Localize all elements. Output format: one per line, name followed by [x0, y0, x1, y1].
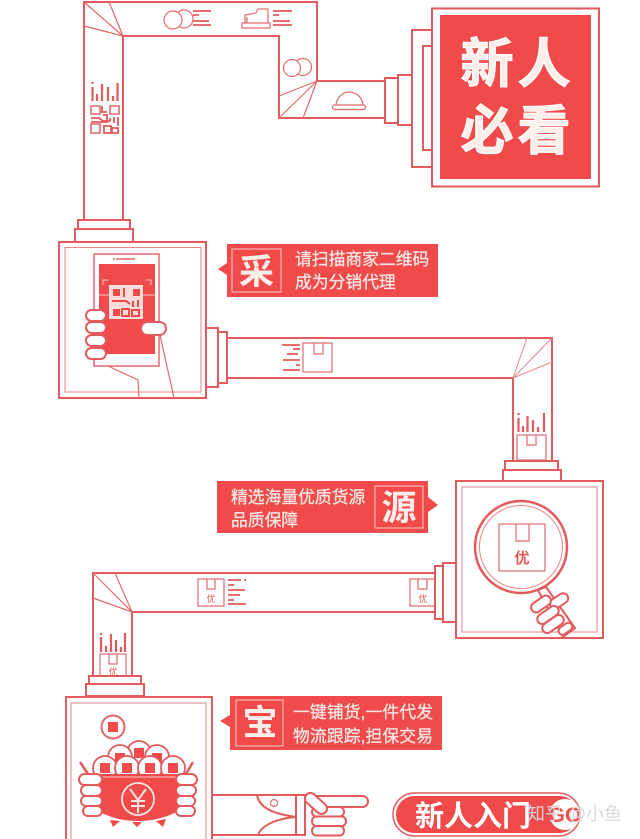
- button: 新人入门 GO: GO: [549, 804, 581, 827]
- button: 新人入门 GO: 新人入门: [415, 800, 531, 833]
- hand holding magnifier: [529, 591, 574, 636]
- icon: bars and parcel on vertical pipe: [100, 633, 126, 677]
- callout: 源: [217, 481, 438, 533]
- title block: 新人必看: [432, 8, 599, 186]
- icon: QR code on vertical pipe: [91, 106, 119, 133]
- icon: parcel with label lines: [198, 579, 246, 606]
- title text: 必: [460, 102, 514, 161]
- callout: 宝: 物流跟踪,担保交易: [293, 727, 433, 746]
- watermark: 知乎 @小鱼: [527, 804, 622, 824]
- icon: cash register on top pipe: [242, 9, 292, 28]
- hand: fingers and wrist: [86, 310, 174, 398]
- flanges: top of first box: [75, 220, 133, 242]
- panel: scan box: [59, 242, 206, 398]
- callout: 采: [218, 244, 438, 297]
- icon: coins in pot: [93, 741, 185, 780]
- flanges: second pipe out of scan box: [206, 328, 227, 387]
- title text: 看: [518, 102, 570, 161]
- icon: magnifier with parcel: 优: [514, 550, 530, 567]
- QR code on phone screen: [109, 285, 143, 319]
- icon: pot with yen sign: [80, 762, 193, 827]
- flanges: top of magnifier box: [503, 461, 561, 482]
- flanges: third pipe out of magnifier box: [435, 563, 456, 622]
- callout: 宝: 一键铺货,一件代发: [293, 703, 433, 722]
- connector: pipe flanges into title box: [385, 30, 432, 167]
- callout: 源: 源: [381, 489, 417, 528]
- button: 新人入门 GO: [393, 793, 581, 836]
- icon: bars and parcel on vertical pipe: [517, 413, 546, 460]
- callout: 采: 采: [239, 253, 274, 292]
- title text: 人: [518, 35, 570, 94]
- icon: parcel with speed lines: [282, 343, 332, 372]
- callout: 采: 请扫描商家二维码: [295, 250, 429, 269]
- icon: bars on vertical pipe: [92, 82, 118, 101]
- icon: pointing hand: [212, 791, 368, 836]
- pipe: third conduit: [93, 573, 435, 677]
- icon: parcel near flange: [410, 579, 435, 606]
- hands holding pot: [79, 774, 197, 816]
- callout: 源: 品质保障: [231, 511, 298, 530]
- callout: 宝: 宝: [242, 704, 278, 743]
- panel: treasure box: [66, 697, 212, 839]
- phone: [94, 254, 159, 366]
- flanges: top of treasure box: [86, 676, 144, 696]
- title text: 新: [460, 35, 514, 94]
- callout: 宝: [220, 696, 442, 750]
- icon: bars and parcel on vertical pipe: 优: [108, 666, 118, 677]
- pipe: top conduit from first box to title: [84, 2, 385, 220]
- icon: apples on descending pipe: [284, 58, 312, 76]
- icon: parcel with label lines: 优: [206, 593, 216, 604]
- icon: parcel near flange: 优: [418, 593, 428, 604]
- pipe: second conduit: [227, 338, 552, 462]
- title text: [460, 35, 570, 161]
- icon: magnifier with parcel: [475, 501, 575, 637]
- callout: 采: 成为分销代理: [295, 273, 396, 292]
- callout: 源: 精选海量优质货源: [231, 488, 365, 507]
- icon: single coin: [102, 716, 124, 738]
- panel: magnifier box: [456, 481, 603, 638]
- icon: apples on top pipe: [164, 10, 211, 29]
- icon: service bell: [332, 92, 366, 110]
